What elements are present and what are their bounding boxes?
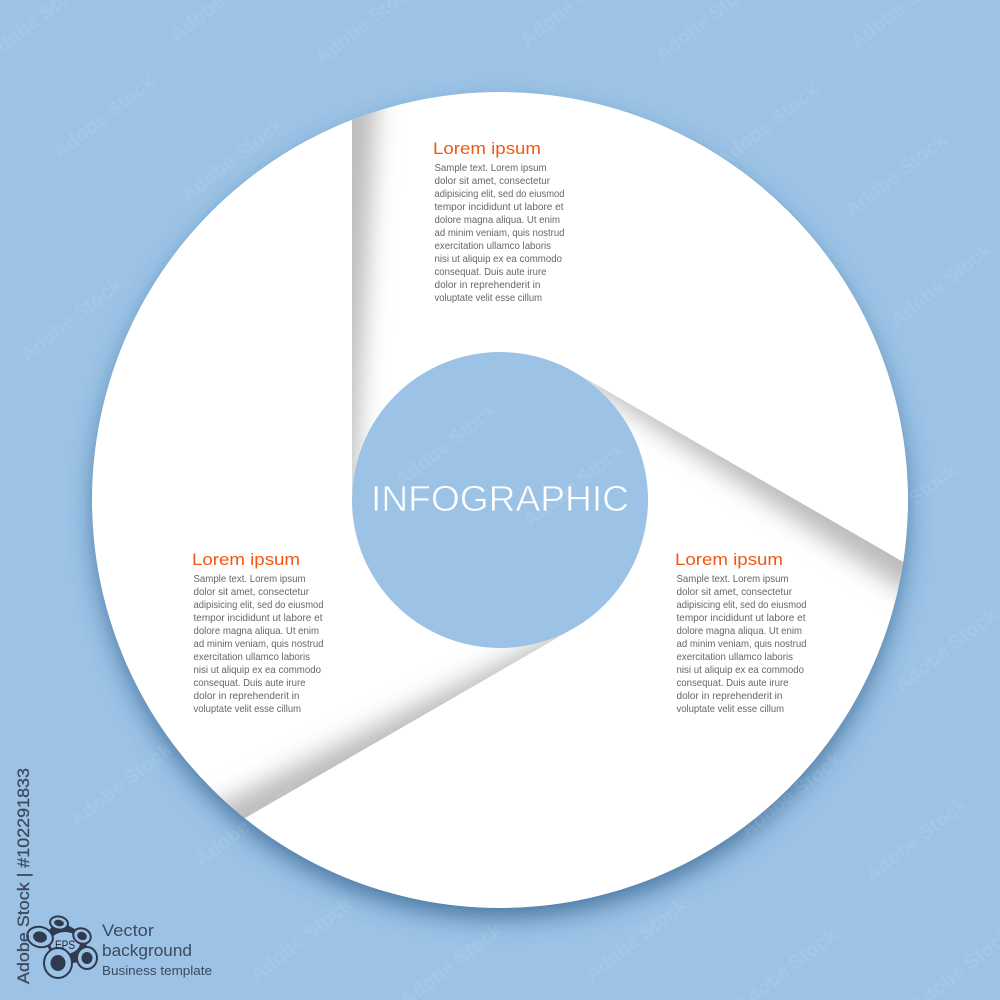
text block: right segment: Lorem ipsum	[675, 551, 783, 569]
text block: top segment	[433, 140, 565, 304]
watermarks: Adobe Stock	[581, 893, 692, 987]
text block: right segment	[675, 551, 807, 715]
text block: top segment: nisi ut aliquip ex ea commodo	[434, 254, 562, 265]
watermarks: Adobe Stock	[891, 603, 1000, 697]
watermarks: Adobe Stock	[851, 458, 962, 552]
watermarks: Adobe Stock	[519, 438, 630, 532]
watermarks: Adobe Stock	[841, 128, 952, 222]
watermarks: Adobe Stock	[713, 78, 824, 172]
text block: right segment: nisi ut aliquip ex ea commodo	[676, 665, 804, 676]
fold shadow: right edge	[578, 374, 904, 600]
text block: top segment: consequat. Duis aute irure	[434, 267, 547, 278]
text block: top segment: Sample text. Lorem ipsum	[434, 163, 546, 174]
text block: top segment: tempor incididunt ut labore et	[434, 202, 564, 213]
centre hole	[352, 352, 648, 648]
text block: left segment: consequat. Duis aute irure	[194, 678, 306, 689]
watermarks: Adobe Stock	[246, 893, 357, 987]
text block: right segment: dolore magna aliqua. Ut enim	[676, 626, 802, 637]
text block: vector background caption: Business template	[102, 963, 212, 978]
watermarks: Adobe Stock	[736, 748, 847, 842]
text block: left segment: dolor in reprehenderit in	[194, 691, 300, 702]
text block: left segment: ad minim veniam, quis nostrud	[194, 639, 324, 650]
watermarks: Adobe Stock	[861, 793, 972, 887]
text block: right segment: ad minim veniam, quis nostrud	[676, 639, 807, 650]
circle drop shadow	[95, 107, 905, 917]
watermarks: Adobe Stock	[191, 778, 302, 872]
fold shadow: top vertical edge	[352, 108, 390, 492]
text block: top segment: adipisicing elit, sed do eiusmod	[434, 189, 565, 200]
text block: top segment: dolor sit amet, consectetur	[434, 176, 551, 187]
text block: top segment: voluptate velit esse cillum	[434, 293, 542, 304]
text block: left segment: exercitation ullamco laboris	[194, 652, 310, 663]
text block: left segment: dolore magna aliqua. Ut enim	[194, 626, 319, 637]
watermarks: Adobe Stock	[177, 113, 288, 207]
text block: left segment: nisi ut aliquip ex ea commodo	[194, 665, 321, 676]
text block: top segment: dolore magna aliqua. Ut enim	[434, 215, 560, 226]
text block: top segment: dolor in reprehenderit in	[434, 280, 540, 291]
watermarks: Adobe Stock	[16, 273, 127, 367]
text block: left segment: Sample text. Lorem ipsum	[194, 574, 306, 585]
text block: right segment: Sample text. Lorem ipsum	[676, 574, 788, 585]
text block: left segment: dolor sit amet, consectetur	[194, 587, 310, 598]
text block: vector background caption: Vector	[102, 921, 154, 940]
icon: EPS logo: EPS	[55, 938, 75, 952]
text block: left segment: Lorem ipsum	[192, 551, 300, 569]
text block: right segment: tempor incididunt ut labore et	[676, 613, 806, 624]
vertical stock id text: Adobe Stock | #102291833	[14, 768, 33, 984]
text block: vector background caption: background	[102, 941, 192, 960]
panel: white ring	[92, 92, 908, 908]
fold shadow: lower left edge	[216, 631, 569, 818]
text block: left segment: voluptate velit esse cillum	[194, 704, 301, 715]
text block: left segment	[192, 551, 324, 715]
text block: top segment: exercitation ullamco laboris	[434, 241, 551, 252]
text block: right segment: exercitation ullamco laboris	[676, 652, 793, 663]
text block: left segment: tempor incididunt ut labore et	[194, 613, 323, 624]
watermarks: Adobe Stock	[66, 738, 177, 832]
text block: top segment: Lorem ipsum	[433, 140, 541, 158]
text block: right segment: voluptate velit esse cillum	[676, 704, 784, 715]
text block: vector background caption	[102, 921, 212, 978]
icon: EPS logo	[25, 915, 97, 978]
heading: centre title: INFOGRAPHIC	[371, 478, 629, 519]
watermarks: Adobe Stock	[339, 293, 450, 387]
text block: left segment: adipisicing elit, sed do eiusmod	[194, 600, 324, 611]
text block: top segment: ad minim veniam, quis nostrud	[434, 228, 565, 239]
watermarks: Adobe Stock	[391, 398, 502, 492]
fold shadows	[216, 108, 904, 818]
text block: right segment: dolor in reprehenderit in	[676, 691, 782, 702]
text block: right segment: consequat. Duis aute irure	[676, 678, 789, 689]
text block: right segment: dolor sit amet, consectetur	[676, 587, 793, 598]
watermarks: Adobe Stock	[886, 238, 997, 332]
text block: right segment: adipisicing elit, sed do eiusmod	[676, 600, 807, 611]
watermarks: Adobe Stock	[49, 70, 160, 164]
